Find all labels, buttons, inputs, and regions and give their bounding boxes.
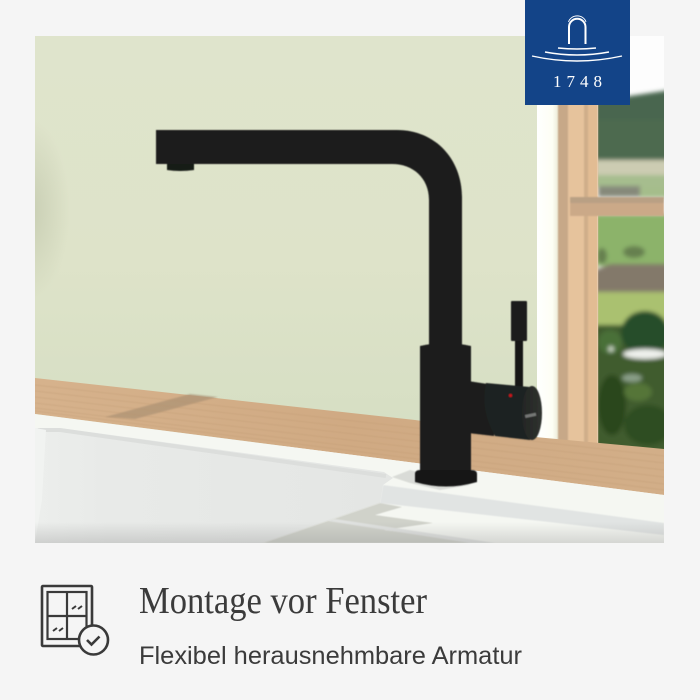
lever xyxy=(511,301,527,388)
spout xyxy=(156,130,462,350)
white countertop xyxy=(35,414,664,495)
shelf edge and shadows xyxy=(263,470,664,543)
base ring xyxy=(415,470,477,486)
wall xyxy=(0,36,538,446)
window frame xyxy=(557,105,664,443)
icon: window with check xyxy=(42,586,108,654)
subheading: Flexibel herausnehmbare Armatur xyxy=(139,642,522,670)
logo mark xyxy=(532,16,622,61)
window reveal xyxy=(537,105,558,439)
info panel xyxy=(0,543,700,700)
aerator xyxy=(167,164,194,171)
base body xyxy=(420,343,471,474)
brand mark xyxy=(525,413,536,418)
outdoor landscape xyxy=(598,88,664,449)
red dot xyxy=(509,394,512,397)
logo year: 1748 xyxy=(553,72,602,91)
mixer handle xyxy=(436,381,542,440)
sink bowl xyxy=(35,428,393,543)
bottom fade xyxy=(35,527,664,543)
product photo: faucet in front of window xyxy=(0,36,672,543)
faucet xyxy=(156,130,542,486)
logo badge xyxy=(525,0,630,105)
wooden worktop xyxy=(35,378,664,495)
heading: Montage vor Fenster xyxy=(139,580,427,622)
